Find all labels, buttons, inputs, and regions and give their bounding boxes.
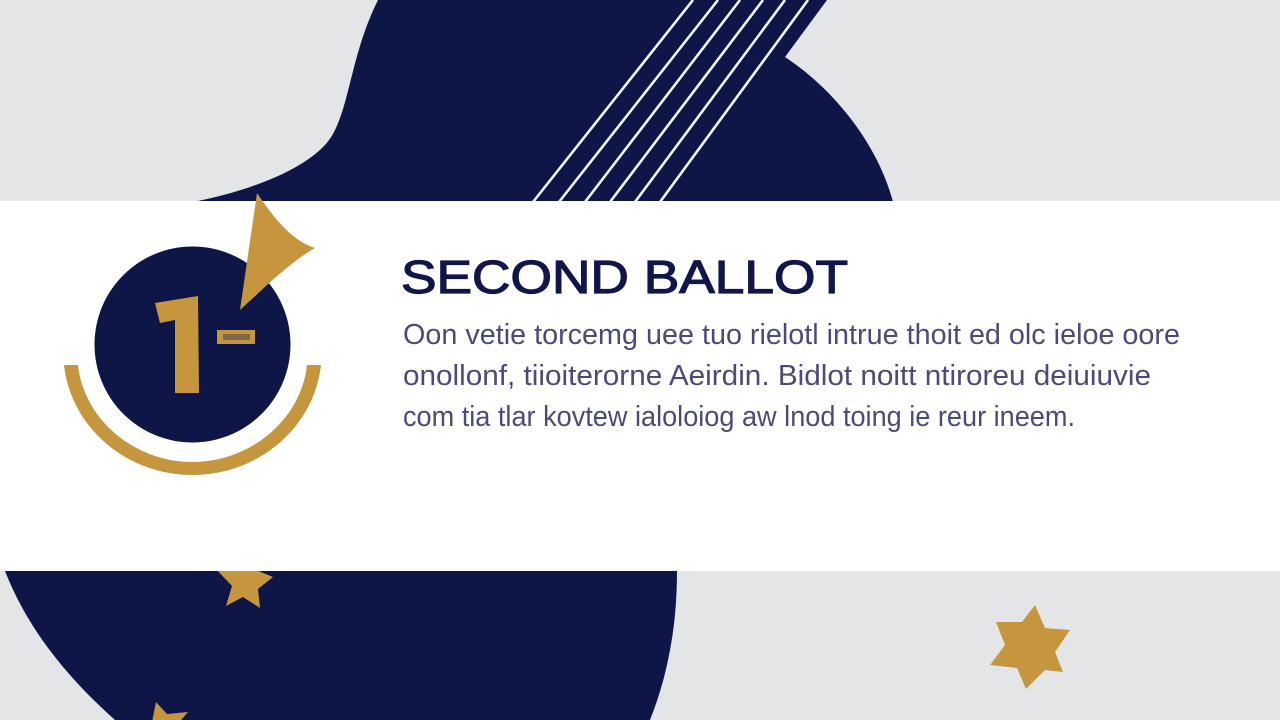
icon: number badge	[64, 193, 321, 475]
line 2: onollonf, tiioiterorne Aeirdin. Bidlot noitt ntiroreu deiuiuvie	[403, 360, 1151, 392]
star: lower left	[146, 702, 188, 720]
bottom navy shape	[5, 571, 677, 720]
body text	[403, 319, 1180, 433]
pennant	[240, 193, 315, 310]
gold arc	[64, 365, 321, 475]
line 1: Oon vetie torcemg uee tuo rielotl intrue thoit ed olc ieloe oore	[403, 319, 1180, 351]
line 3: com tia tlar kovtew ialoloiog aw lnod toing ie reur ineem.	[403, 401, 1075, 433]
heading: SECOND BALLOT	[401, 251, 848, 303]
numeral one	[155, 296, 199, 393]
badge circle	[94, 246, 290, 442]
star: middle	[212, 560, 273, 608]
star: right six-pointed	[990, 605, 1070, 689]
dash mark	[217, 330, 255, 344]
white content band	[0, 201, 1280, 571]
top navy shape with diagonal stripes	[193, 0, 893, 202]
